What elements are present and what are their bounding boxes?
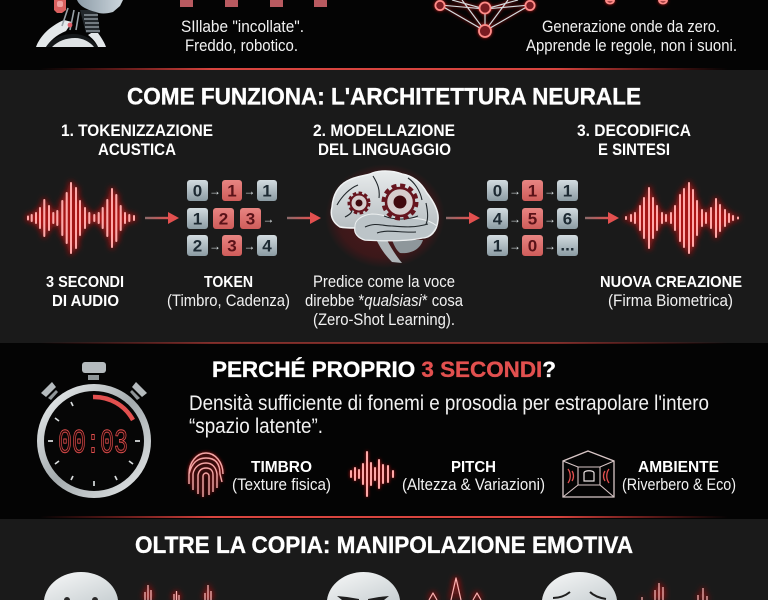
label: 3 secondi di audio: 3 SECONDI — [46, 274, 124, 291]
arrow: token to brain — [287, 212, 321, 224]
label: nuova creazione: NUOVA CREAZIONE — [600, 274, 742, 291]
token grid 1: 3 — [246, 210, 255, 228]
token grid 2: 1 — [493, 236, 502, 256]
chart: calm waveform — [145, 585, 211, 600]
label: nuova creazione: (Firma Biometrica) — [608, 291, 733, 310]
token grid 1: → — [244, 184, 256, 198]
icon: brain with gears — [325, 164, 445, 268]
label: ambiente — [622, 459, 736, 494]
label: token — [167, 274, 290, 310]
text: sintesi neurale — [526, 17, 737, 55]
token grid 1: 4 — [262, 236, 272, 256]
arrow: brain to token — [446, 212, 480, 224]
token grid 2: 6 — [563, 210, 572, 228]
token grid 1: → — [209, 184, 221, 198]
step heading 2: 2. MODELLAZIONE — [313, 121, 455, 140]
chart: output waveform — [626, 183, 738, 253]
token grid 2: → — [544, 184, 556, 198]
label: predizione: (Zero-Shot Learning). — [313, 310, 455, 329]
heading: oltre la copia: OLTRE LA COPIA: MANIPOLAZIONE EMOTIVA — [135, 532, 633, 559]
label: predizione: direbbe *qualsiasi* cosa — [305, 291, 463, 310]
token grid 2: → — [509, 184, 521, 198]
token grid 1: 2 — [219, 210, 228, 228]
token grid 2: 1 — [563, 182, 572, 200]
label: nuova creazione — [600, 274, 742, 310]
stopwatch display: 00:03 — [58, 426, 128, 464]
token grid 2: 0 — [528, 236, 537, 256]
label: pitch: PITCH — [451, 459, 496, 476]
step heading 3: E SINTESI — [598, 140, 670, 159]
icon: neural network — [435, 0, 667, 37]
label: predizione — [305, 272, 463, 329]
icon: concatenated syllable blocks — [180, 0, 327, 7]
arrow: token to output — [585, 212, 619, 224]
token grid 2: 4 — [493, 210, 503, 228]
token grid 2: 1 — [528, 182, 537, 200]
token grid 2: 5 — [528, 210, 537, 228]
arrow: audio to token — [145, 212, 179, 224]
label: timbro — [232, 459, 331, 494]
token grid 1: → — [209, 239, 221, 253]
icon: fingerprint — [189, 453, 223, 497]
token grid 1: 2 — [193, 236, 202, 256]
token grid 2: → — [509, 239, 521, 253]
step heading 2 — [313, 121, 455, 159]
label: timbro: (Texture fisica) — [232, 476, 331, 494]
text: sintesi concatenativa: SIllabe "incollate". — [181, 17, 304, 36]
step heading 3: 3. DECODIFICA — [577, 121, 691, 140]
token grid 1: → — [262, 212, 274, 226]
token grid 2: → — [544, 239, 556, 253]
label: pitch — [402, 459, 545, 494]
label: timbro: TIMBRO — [251, 459, 312, 476]
text: sintesi concatenativa — [181, 17, 304, 55]
token grid 2 — [487, 180, 578, 256]
chart: angry waveform — [429, 578, 481, 600]
token grid 1: 1 — [262, 182, 272, 200]
step heading 2: DEL LINGUAGGIO — [318, 140, 451, 159]
label: 3 secondi di audio — [46, 274, 124, 310]
token grid 2: → — [544, 212, 556, 226]
label: token: TOKEN — [204, 274, 253, 291]
panel background: oltre la copia — [0, 519, 768, 600]
token grid 2: → — [509, 212, 521, 226]
label: predizione: Predice come la voce — [313, 272, 455, 291]
emotion mask: sad — [542, 572, 617, 600]
token grid 1 — [187, 180, 277, 256]
step heading 1: 1. TOKENIZZAZIONE — [61, 121, 213, 140]
label: ambiente: (Riverbero & Eco) — [622, 476, 736, 494]
token grid 1: 1 — [227, 182, 237, 200]
chart: sad waveform — [642, 583, 707, 600]
panel background: architettura neurale — [0, 70, 768, 343]
text block: spiegazione — [189, 392, 709, 438]
panel: confronto vecchia e nuova sintesi — [36, 0, 737, 55]
text block: spiegazione: Densità sufficiente di fonemi e prosodia per estrapolare l'intero — [189, 392, 709, 415]
icon: room with echo — [563, 451, 614, 497]
label: pitch: (Altezza & Variazioni) — [402, 476, 545, 494]
step heading 3 — [577, 121, 691, 159]
step heading 1: ACUSTICA — [98, 140, 176, 159]
token grid 1: 0 — [193, 182, 202, 200]
text: sintesi neurale: Apprende le regole, non i suoni. — [526, 36, 737, 55]
chart: input waveform — [28, 183, 134, 253]
emotion mask: angry — [327, 572, 400, 600]
step heading 1 — [61, 121, 213, 159]
heading: perche proprio 3 secondi: PERCHÉ PROPRIO 3 SECONDI? — [212, 357, 556, 382]
icon: robot head — [36, 0, 123, 47]
text: sintesi concatenativa: Freddo, robotico. — [185, 36, 298, 55]
token grid 2: ... — [560, 236, 575, 254]
heading: come funziona: COME FUNZIONA: L'ARCHITETTURA NEURALE — [127, 84, 641, 110]
text: sintesi neurale: Generazione onde da zero. — [542, 17, 720, 36]
token grid 1: 3 — [227, 236, 237, 256]
label: token: (Timbro, Cadenza) — [167, 291, 290, 310]
text block: spiegazione: “spazio latente”. — [189, 415, 323, 438]
emotion mask: calm — [44, 572, 118, 600]
token grid 1: → — [244, 239, 256, 253]
token grid 2: 0 — [493, 182, 502, 200]
token grid 1: 1 — [193, 210, 202, 228]
label: 3 secondi di audio: DI AUDIO — [52, 293, 119, 310]
icon: stopwatch — [40, 362, 148, 494]
icon: pitch waveform — [351, 452, 393, 496]
label: ambiente: AMBIENTE — [638, 459, 719, 476]
